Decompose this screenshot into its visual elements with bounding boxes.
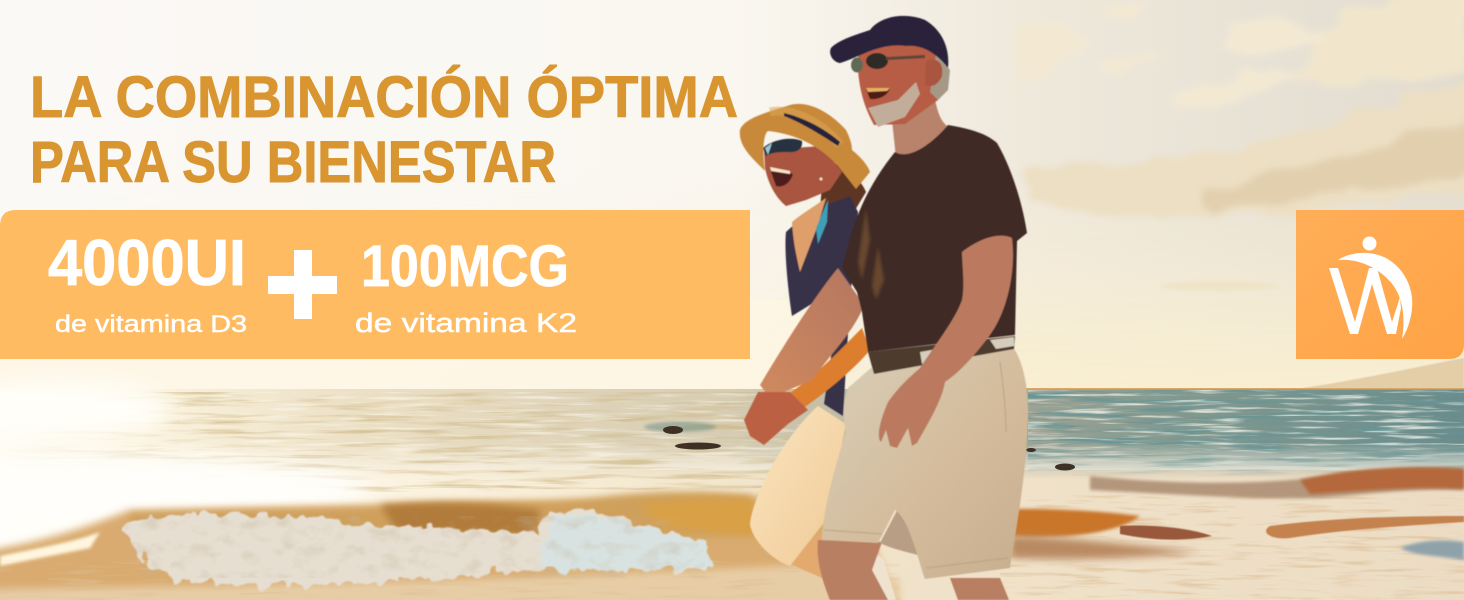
- wet sand in front of wave: [0, 496, 900, 600]
- man belt: [868, 336, 1015, 374]
- icon: plus sign: [268, 250, 337, 319]
- dose: vitamin K2: de vitamina K2: [355, 308, 577, 338]
- woman earring: [820, 178, 822, 180]
- man legs: [818, 540, 1009, 600]
- orange wave crest: [130, 492, 756, 545]
- cap: [830, 16, 948, 68]
- woman trousers: [750, 406, 846, 566]
- heading: [30, 65, 738, 195]
- sea: [0, 382, 1464, 600]
- hat band: [784, 113, 840, 146]
- woman lower leg: [786, 530, 850, 580]
- shirt sunlight: [858, 208, 884, 300]
- woman top: [785, 196, 858, 416]
- cloud band: [1025, 84, 1464, 217]
- foam: [122, 510, 709, 585]
- woman sunglasses: [763, 139, 802, 156]
- man neck and head: [830, 16, 950, 158]
- woman straw hat: [740, 104, 870, 189]
- man arm and woman arm linked: [744, 268, 870, 445]
- shorts hem and folds: [824, 362, 1008, 568]
- woman arm: [782, 328, 870, 412]
- mouth: [866, 88, 890, 99]
- woman mouth: [770, 169, 793, 186]
- dose: vitamin D3: [48, 226, 247, 338]
- man t-shirt: [842, 125, 1027, 352]
- dose: vitamin K2: 100MCG: [361, 234, 569, 299]
- left shore and wave: [0, 492, 900, 600]
- dose: vitamin D3: de vitamina D3: [55, 311, 247, 338]
- woman far trouser leg: [860, 540, 896, 600]
- ear: [925, 60, 942, 86]
- heading: PARA SU BIENESTAR: [30, 130, 556, 195]
- sunglasses: [851, 53, 925, 72]
- man shorts: [822, 346, 1028, 579]
- dose: vitamin K2: [355, 234, 577, 338]
- man far shorts shadow: [880, 505, 918, 555]
- beach and far-right waves: [1000, 467, 1464, 600]
- photo: couple walking: [740, 16, 1028, 600]
- panel: brand logo: [1296, 210, 1464, 359]
- dose: vitamin D3: 4000UI: [48, 226, 246, 299]
- joined hands: [744, 392, 808, 445]
- woman top stripe: [816, 200, 828, 244]
- man left arm: [760, 268, 864, 398]
- rocks: [663, 426, 1075, 470]
- man right arm and hand: [879, 236, 1013, 448]
- belt highlight: [920, 337, 1014, 364]
- woman: [740, 104, 896, 600]
- icon: WV logo: [1329, 236, 1412, 339]
- beard: [868, 82, 920, 127]
- sky: [0, 0, 1464, 392]
- woman hair: [820, 160, 866, 215]
- grey hair: [930, 54, 950, 100]
- heading: LA COMBINACIÓN ÓPTIMA: [30, 65, 738, 130]
- woman face: [764, 146, 842, 206]
- woman chest: [792, 198, 826, 272]
- panel: vitamin doses: [0, 210, 750, 359]
